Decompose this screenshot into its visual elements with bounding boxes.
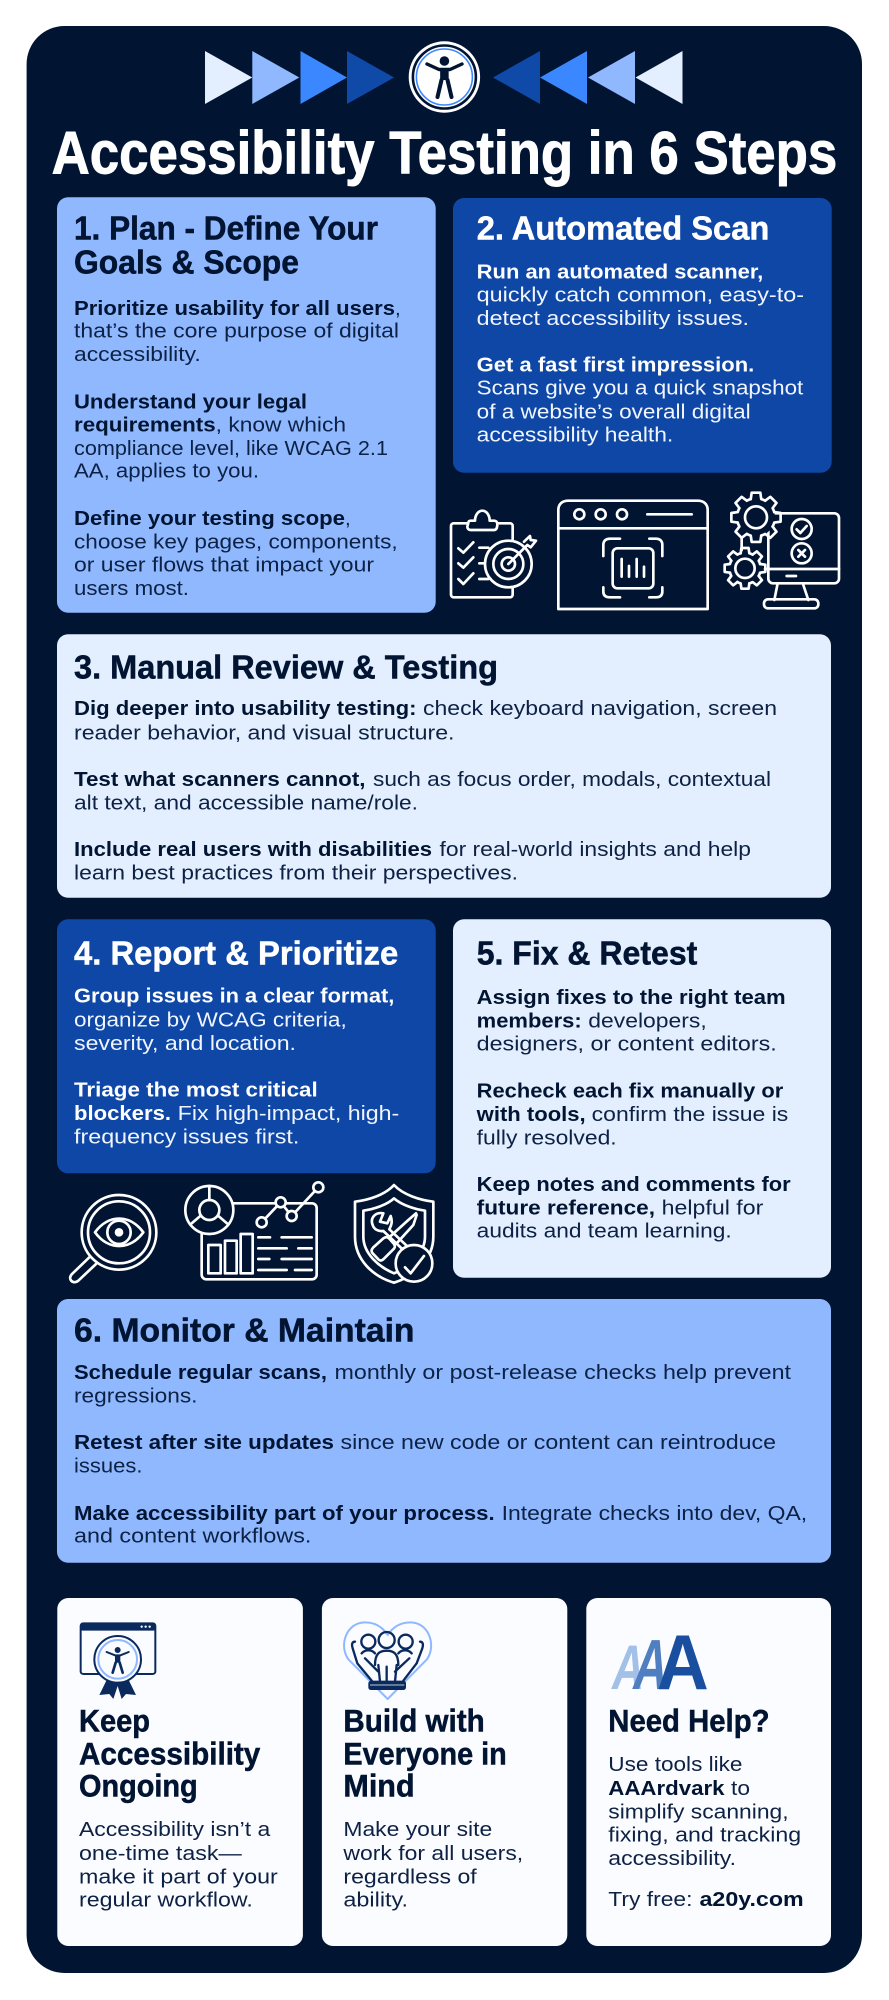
text: keep notes: future reference, (477, 1196, 655, 1219)
text: prioritize usability: accessibility. (74, 343, 201, 366)
text: usability testing: reader behavior, and visual structure. (74, 721, 454, 744)
panel: step 3 manual review (57, 634, 831, 898)
text: retest after updates: Retest after site updates (74, 1431, 334, 1454)
text: first impression: of a website’s overall digital (477, 400, 751, 423)
icon: clipboard with target (451, 511, 536, 597)
text: keep notes: helpful for (662, 1196, 763, 1219)
text: use tools: accessibility. (608, 1847, 736, 1870)
chevrons pointing right (205, 51, 394, 104)
text: group issues (74, 985, 394, 1055)
text: use tools: AAArdvark (608, 1777, 725, 1800)
text: testing scope: choose key pages, components, (74, 530, 398, 553)
text: first impression: accessibility health. (477, 424, 673, 447)
text: all users: regardless of (343, 1865, 477, 1888)
heading: step 5: 5. Fix & Retest (477, 935, 697, 972)
text: real users (74, 838, 751, 884)
panel: step 1 plan (57, 197, 436, 613)
icon: AAA logo: A (608, 1633, 651, 1703)
text: retest after updates: since new code or content can reintroduce (340, 1431, 776, 1454)
text: legal requirements: AA, applies to you. (74, 460, 259, 483)
heading: need help: Need Help? (608, 1703, 770, 1739)
heading: step 1: 1. Plan - Define Your (74, 210, 378, 247)
heading: keep accessibility ongoing: Accessibility (79, 1735, 261, 1771)
heading: step 1: Goals & Scope (74, 244, 299, 281)
text: automated scanner: Run an automated scanner, (477, 260, 763, 283)
text: not a one-time task (79, 1818, 278, 1912)
icon: analytics dashboard (185, 1182, 323, 1279)
heading: build with everyone in mind (343, 1703, 507, 1804)
text: first impression: Scans give you a quick snapshot (477, 376, 804, 399)
text: assign fixes: developers, (588, 1009, 707, 1032)
text: use tools: Use tools like (608, 1753, 742, 1776)
text: group issues: organize by WCAG criteria, (74, 1009, 347, 1032)
icon: heart with people in hands (344, 1622, 431, 1699)
icon: shield with tools (355, 1185, 433, 1283)
text: what scanners cannot test: alt text, and accessible name/role. (74, 791, 418, 814)
heading: build with everyone in mind: Build with (343, 1703, 485, 1739)
heading: keep accessibility ongoing (79, 1703, 261, 1804)
text: part of your process (74, 1502, 807, 1548)
card: keep accessibility ongoing (57, 1598, 303, 1946)
text: part of your process: and content workflows. (74, 1525, 311, 1548)
heading: build with everyone in mind: Everyone in (343, 1735, 507, 1771)
text: group issues: severity, and location. (74, 1032, 296, 1055)
text: triage blockers (74, 1079, 399, 1148)
text: triage blockers: Fix high-impact, high- (178, 1102, 399, 1125)
text: real users: Include real users with disabilities (74, 838, 432, 861)
text: try free (608, 1888, 804, 1911)
text: regular scans (74, 1361, 791, 1407)
text: assign fixes: designers, or content editors. (477, 1033, 777, 1056)
text: what scanners cannot test: Test what scanners cannot, (74, 768, 366, 791)
panel: step 2 automated scan (453, 198, 832, 473)
text: usability testing: check keyboard navigation, screen (423, 697, 777, 720)
text: all users (342, 1818, 523, 1912)
text: prioritize usability: , (395, 297, 401, 320)
card: need help (586, 1598, 831, 1946)
text: part of your process: Integrate checks into dev, QA, (502, 1502, 807, 1525)
text: assign fixes: Assign fixes to the right team (477, 986, 786, 1009)
text: automated scanner: quickly catch common, easy-to- (477, 284, 804, 307)
text: first impression (477, 354, 804, 447)
text: try free: Try free: (608, 1888, 692, 1911)
heading: step 3: 3. Manual Review & Testing (74, 649, 498, 686)
text: testing scope: or user flows that impact your (74, 554, 374, 577)
heading: keep accessibility ongoing: Keep (79, 1703, 150, 1739)
text: prioritize usability: that’s the core purpose of digital (74, 320, 399, 343)
text: use tools (608, 1753, 801, 1870)
text: legal requirements: requirements (74, 414, 216, 437)
text: testing scope (74, 507, 398, 600)
icon: accessibility logo (409, 41, 480, 113)
icon: AAA logo (608, 1618, 709, 1706)
header chevrons and logo (205, 41, 682, 113)
text: prioritize usability (74, 297, 401, 366)
text: triage blockers: Triage the most critical (74, 1079, 318, 1102)
heading: step 1 (74, 210, 378, 281)
text: usability testing: Dig deeper into usability testing: (74, 697, 416, 720)
text: first impression: Get a fast first impression. (477, 354, 754, 377)
text: recheck fixes: fully resolved. (477, 1126, 617, 1149)
card: build with everyone in mind (322, 1598, 567, 1946)
heading: step 2: 2. Automated Scan (477, 210, 769, 247)
heading: keep accessibility ongoing: Ongoing (79, 1768, 198, 1804)
heading: build with everyone in mind: Mind (343, 1768, 415, 1804)
text: recheck fixes: confirm the issue is (592, 1103, 788, 1126)
text: legal requirements: compliance level, like WCAG 2.1 (74, 437, 388, 460)
text: keep notes: audits and team learning. (477, 1220, 732, 1243)
text: regular scans: monthly or post-release checks help prevent (334, 1361, 791, 1384)
text: regular scans: Schedule regular scans, (74, 1361, 327, 1384)
text: recheck fixes (476, 1080, 788, 1149)
text: triage blockers: frequency issues first. (74, 1125, 299, 1148)
text: what scanners cannot test: such as focus order, modals, contextual (373, 768, 771, 791)
text: automated scanner (477, 260, 804, 330)
icon: gears and monitor (725, 493, 839, 608)
text: assign fixes (477, 986, 786, 1056)
text: all users: Make your site (343, 1818, 492, 1841)
text: try free: a20y.com (700, 1888, 804, 1911)
text: not a one-time task: make it part of your (79, 1865, 278, 1888)
text: use tools: simplify scanning, (608, 1800, 789, 1823)
text: not a one-time task: one-time task— (79, 1842, 242, 1865)
text: real users: learn best practices from their perspectives. (74, 861, 518, 884)
text: legal requirements: Understand your legal (74, 390, 307, 413)
text: regular scans: regressions. (74, 1384, 198, 1407)
text: testing scope: , (345, 507, 351, 530)
text: prioritize usability: Prioritize usability for all users (74, 297, 395, 320)
icon: accessibility award (81, 1623, 155, 1699)
text: group issues: Group issues in a clear format, (74, 985, 394, 1008)
text: use tools: fixing, and tracking (608, 1824, 801, 1847)
text: assign fixes: members: (477, 1009, 582, 1032)
text: not a one-time task: Accessibility isn’t a (79, 1818, 271, 1841)
text: automated scanner: detect accessibility issues. (477, 307, 749, 330)
text: keep notes: Keep notes and comments for (477, 1173, 791, 1196)
text: not a one-time task: regular workflow. (79, 1889, 253, 1912)
text: testing scope: users most. (74, 577, 189, 600)
panel: step 5 fix and retest (453, 919, 831, 1278)
text: legal requirements (74, 390, 388, 483)
heading: step 6: 6. Monitor & Maintain (74, 1313, 414, 1350)
icon: browser scan (558, 501, 708, 609)
text: real users: for real-world insights and help (440, 838, 751, 861)
text: keep notes (477, 1173, 791, 1243)
text: usability testing (74, 697, 777, 744)
text: triage blockers: blockers. (74, 1102, 171, 1125)
text: all users: ability. (343, 1889, 408, 1912)
chevrons pointing left (493, 51, 682, 104)
icon: AAA logo: A (628, 1625, 675, 1705)
text: all users: work for all users, (342, 1842, 523, 1865)
icon: magnifier with eye (70, 1195, 156, 1282)
text: use tools: to (731, 1777, 750, 1800)
text: retest after updates: issues. (74, 1455, 142, 1478)
text: part of your process: Make accessibility part of your process. (74, 1502, 495, 1525)
panel: step 6 monitor and maintain (57, 1299, 831, 1563)
icon: AAA logo: A (657, 1618, 709, 1706)
panel: step 4 report and prioritize (57, 919, 436, 1173)
heading: step 4: 4. Report & Prioritize (74, 935, 398, 972)
text: recheck fixes: with tools, (476, 1103, 586, 1126)
text: legal requirements: , know which (216, 414, 346, 437)
text: recheck fixes: Recheck each fix manually or (477, 1080, 783, 1103)
text: what scanners cannot test (74, 768, 771, 814)
text: testing scope: Define your testing scope (74, 507, 345, 530)
text: retest after updates (74, 1431, 776, 1478)
